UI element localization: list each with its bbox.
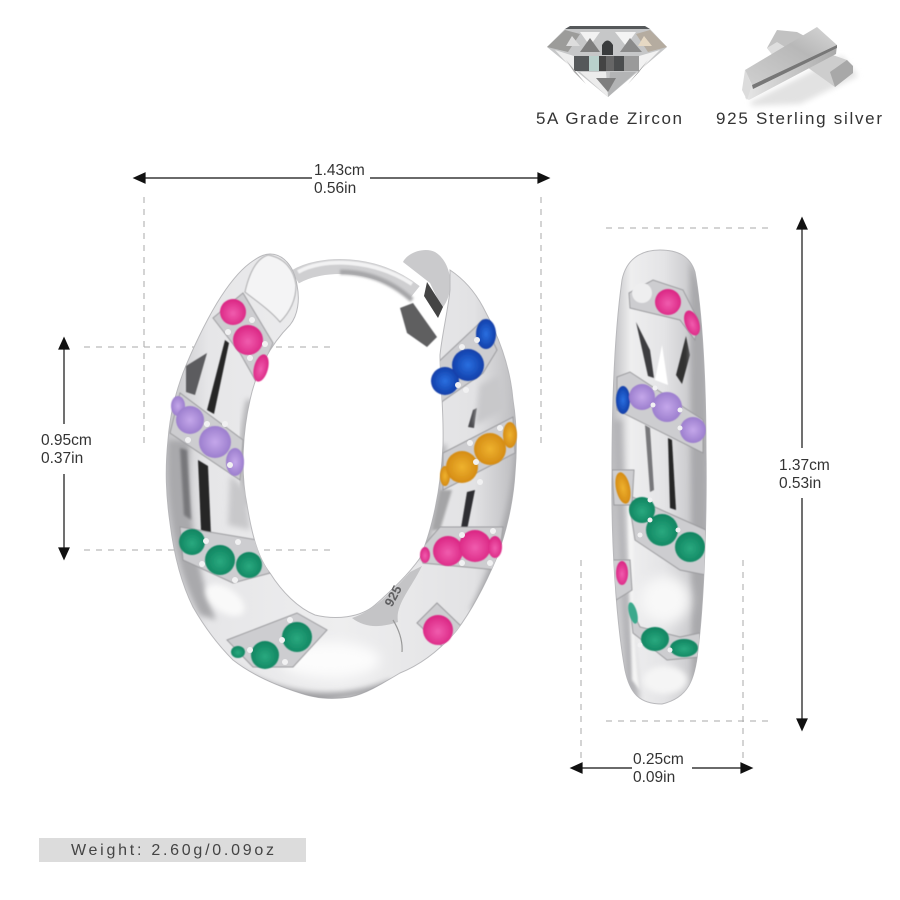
dimension: hoop height — [779, 218, 830, 730]
hoop shading and reflections — [167, 255, 525, 705]
label: 925 Sterling silver: 925 Sterling silver — [716, 109, 882, 128]
bar background — [39, 838, 306, 862]
label: 1.43cm 0.56in: 1.43cm — [314, 162, 365, 179]
gems: blue — [431, 319, 496, 395]
icon: silver bars — [742, 27, 858, 106]
side pavé bands — [612, 280, 706, 660]
side gems — [613, 283, 706, 657]
icon: diamond — [547, 26, 667, 97]
gems: pink top — [220, 299, 271, 383]
arrow: hoop width — [134, 173, 549, 183]
label: 0.95cm 0.37in: 0.95cm — [41, 432, 92, 449]
hoop pin wire — [295, 263, 415, 300]
gems: green bottom — [231, 622, 312, 669]
arrow: hoop thickness — [571, 763, 752, 773]
feature: 925 sterling silver — [716, 27, 882, 128]
label: 0.95cm 0.37in: 0.37in — [41, 450, 83, 467]
label: 1.43cm 0.56in: 0.56in — [314, 180, 356, 197]
gem: pink single — [423, 615, 453, 645]
weight bar — [39, 838, 306, 862]
label: 1.37cm 0.53in: 1.37cm — [779, 457, 830, 474]
side prongs — [638, 386, 682, 652]
earring: side view — [612, 250, 708, 704]
earring: front view — [166, 250, 525, 705]
pavé bands — [170, 293, 515, 667]
feature: 5A grade zircon — [536, 26, 682, 128]
side shading and reflections — [612, 260, 708, 700]
arrow: inner diameter — [59, 338, 69, 559]
gems: pink right — [420, 530, 502, 566]
label: 5A Grade Zircon: 5A Grade Zircon — [536, 109, 682, 128]
label: 1.37cm 0.53in: 0.53in — [779, 475, 821, 492]
gems: lavender — [171, 396, 244, 476]
hinge — [400, 250, 450, 347]
gems: green middle — [179, 529, 262, 578]
label: 0.25cm 0.09in: 0.25cm — [633, 751, 684, 768]
setting prongs — [185, 317, 503, 665]
side body — [612, 250, 706, 704]
arrow: hoop height — [797, 218, 807, 730]
dimension: inner diameter — [41, 338, 92, 559]
guide lines — [84, 197, 770, 762]
label: 0.25cm 0.09in: 0.09in — [633, 769, 675, 786]
dimension: hoop thickness — [571, 751, 752, 786]
label: weight: Weight: 2.60g/0.09oz — [71, 842, 274, 859]
hoop body — [166, 254, 516, 698]
engraved 925 mark: 925 — [381, 583, 405, 609]
gems: amber — [440, 422, 517, 486]
dimension: hoop width — [134, 162, 549, 197]
